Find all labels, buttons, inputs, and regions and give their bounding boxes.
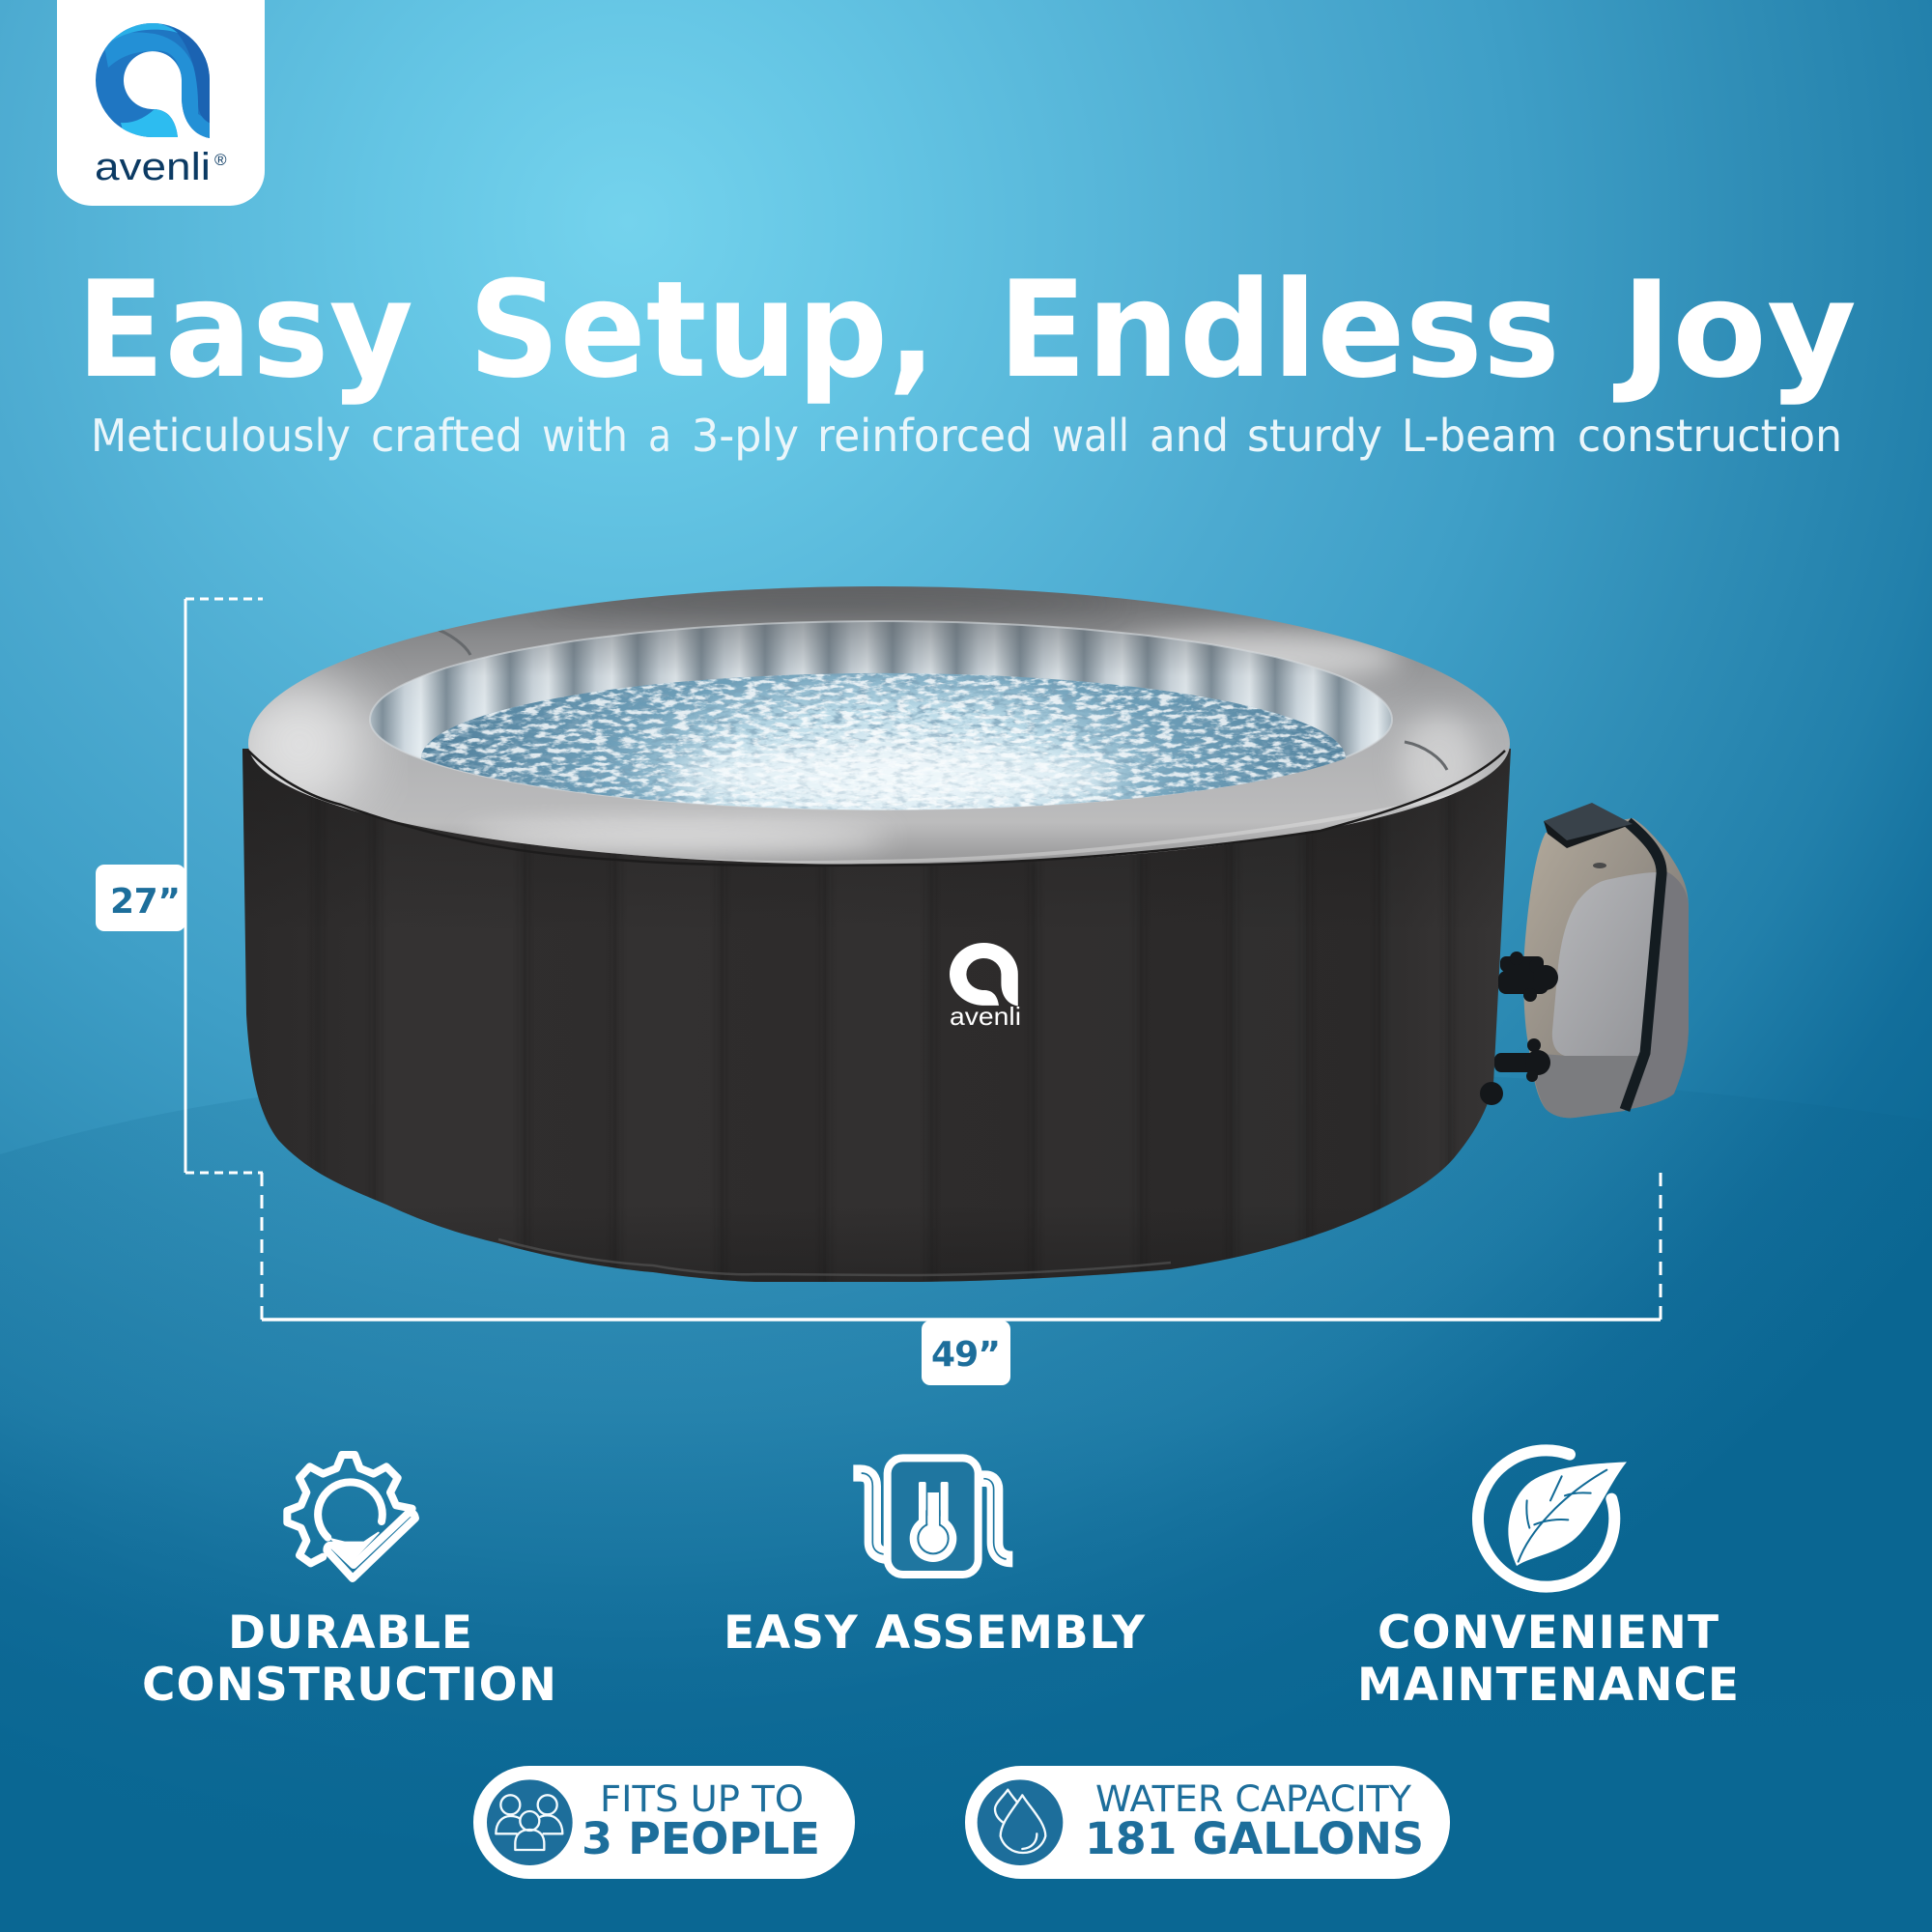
icon: thermometer in box with pipes [853,1458,1012,1575]
label: convenient maintenance: CONVENIENT [1378,1606,1719,1660]
tub logo [950,943,1021,1031]
inner ribbed wall [371,621,1391,777]
label: durable construction [142,1606,556,1712]
subtitle: construction [1577,410,1842,462]
title: Joy [1613,252,1857,408]
label: easy assembly: EASY ASSEMBLY [724,1606,1146,1660]
pill: water capacity 181 gallons [965,1766,1450,1879]
pump unit [1523,803,1689,1118]
label: convenient maintenance [1357,1606,1739,1712]
subtitle: with [542,410,628,462]
label: durable construction: CONSTRUCTION [142,1659,556,1712]
dimension: width 49 inches: 49” [931,1335,1001,1375]
title: Easy [76,252,413,408]
icon: gear with check [287,1455,415,1578]
subtitle: Meticulously [91,410,351,462]
subtitle [91,410,1842,462]
pill: fits up to 3 people [473,1766,855,1879]
subtitle: and [1150,410,1229,462]
bubbling water [421,672,1346,810]
subtitle: crafted [371,410,523,462]
hot tub [232,586,1689,1294]
label: convenient maintenance: MAINTENANCE [1357,1659,1739,1712]
subtitle: wall [1052,410,1129,462]
tub logo: avenli [950,1002,1021,1031]
subtitle: sturdy [1247,410,1382,462]
title [76,252,1857,408]
title: Setup, [469,252,936,408]
registered mark: ® [214,151,227,169]
subtitle: 3-ply [692,410,799,462]
pill text: FITS UP TO [600,1778,804,1820]
brand logo card [57,0,265,206]
icon: people [487,1779,573,1865]
inflatable rim [232,586,1510,866]
icon: water drops [978,1779,1063,1865]
dimension: height 27 inches: 27” [110,882,181,922]
subtitle: reinforced [817,410,1033,462]
pill text: WATER CAPACITY [1095,1778,1411,1820]
pill: fits up to 3 people: 3 PEOPLE [582,1813,820,1864]
logo mark [96,23,210,138]
icon: leaf in circle [1478,1450,1627,1587]
pill: water capacity 181 gallons: 181 GALLONS [1085,1813,1424,1864]
subtitle: L-beam [1402,410,1557,462]
label: durable construction: DURABLE [228,1606,472,1660]
pump hoses [1480,952,1558,1105]
floor shading [0,1063,1932,1932]
title: Endless [998,252,1560,408]
dimension: height 27 inches [96,599,263,1173]
dimension: width 49 inches [262,1173,1661,1385]
tub outer wall [232,744,1526,1294]
logo wordmark: avenli [95,146,211,188]
subtitle: a [648,410,671,462]
